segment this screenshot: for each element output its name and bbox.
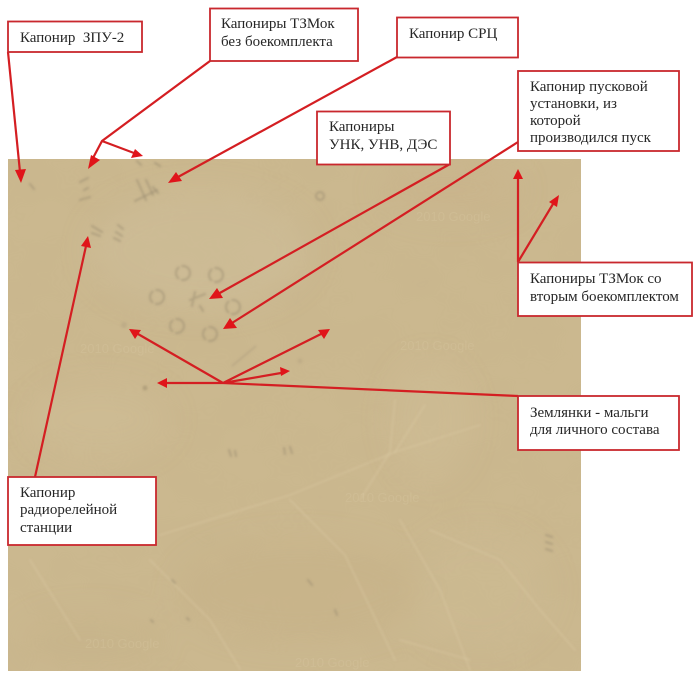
arrows: ТЗМок без боекомплекта bbox=[88, 61, 210, 169]
label: Капонир СРЦ bbox=[397, 18, 518, 58]
arrow: УНК, УНВ, ДЭС bbox=[209, 164, 450, 299]
scattered pits bbox=[121, 322, 552, 622]
label: Капониры УНК, УНВ, ДЭС bbox=[317, 112, 450, 164]
label: Капониры УНК, УНВ, ДЭС: Капониры bbox=[329, 119, 394, 135]
label: Капониры УНК, УНВ, ДЭС: УНК, УНВ, ДЭС bbox=[329, 137, 437, 153]
northern caponiers bbox=[30, 161, 324, 241]
label: Капониры ТЗМок со вторым боекомплектом: Капониры ТЗМок со bbox=[530, 271, 662, 287]
label: Капонир СРЦ: Капонир СРЦ bbox=[409, 26, 497, 42]
arrow: радиорелейная станция bbox=[35, 236, 91, 477]
label: Капонир пусковой установки: которой bbox=[530, 113, 581, 129]
label: Капонир пусковой установки: установки, из bbox=[530, 96, 617, 112]
label: Землянки - мальги для личного состава: для личного состава bbox=[530, 422, 660, 438]
arrow: пусковая установка bbox=[223, 142, 518, 329]
launch site ring of caponiers bbox=[150, 266, 240, 341]
watermarks: 2010 Google bbox=[295, 655, 369, 670]
label: Капонир радиорелейной станции: радиорелейной bbox=[20, 502, 117, 518]
arrow: СРЦ bbox=[168, 57, 397, 183]
label: Землянки - мальги для личного состава bbox=[518, 396, 679, 450]
label: Капонир ЗПУ-2: Капонир ЗПУ-2 bbox=[20, 30, 124, 46]
arrows: землянки bbox=[129, 329, 518, 396]
satellite photo bbox=[8, 159, 581, 671]
watermarks: 2010 Google bbox=[400, 338, 474, 353]
label: Капониры ТЗМок без боекомплекта bbox=[210, 8, 358, 61]
label: Капонир радиорелейной станции bbox=[8, 477, 156, 545]
label: Капонир пусковой установки: Капонир пусковой bbox=[530, 79, 648, 95]
watermarks: 2010 Google bbox=[80, 341, 154, 356]
label: Капониры ТЗМок со вторым боекомплектом bbox=[518, 262, 692, 316]
label: Капониры ТЗМок без боекомплекта: без боекомплекта bbox=[221, 34, 333, 50]
watermarks bbox=[80, 209, 490, 670]
watermarks: 2010 Google bbox=[85, 636, 159, 651]
label: Капонир пусковой установки: производился пуск bbox=[530, 130, 652, 146]
label: Капонир пусковой установки bbox=[518, 71, 679, 151]
label: Капонир радиорелейной станции: станции bbox=[20, 520, 72, 536]
arrow: ЗПУ-2 bbox=[8, 52, 26, 183]
label: Капонир радиорелейной станции: Капонир bbox=[20, 485, 75, 501]
map markings: caponier rings and pits bbox=[30, 161, 552, 622]
label: Капониры ТЗМок без боекомплекта: Капониры ТЗМок bbox=[221, 16, 335, 32]
label: Землянки - мальги для личного состава: Землянки - мальги bbox=[530, 405, 649, 421]
watermarks: 2010 Google bbox=[345, 490, 419, 505]
arrows: ТЗМок со вторым боекомплектом bbox=[513, 169, 559, 262]
label: Капонир ЗПУ-2 bbox=[8, 22, 142, 52]
label: Капониры ТЗМок со вторым боекомплектом: вторым боекомплектом bbox=[530, 289, 679, 305]
watermarks: 2010 Google bbox=[416, 209, 490, 224]
